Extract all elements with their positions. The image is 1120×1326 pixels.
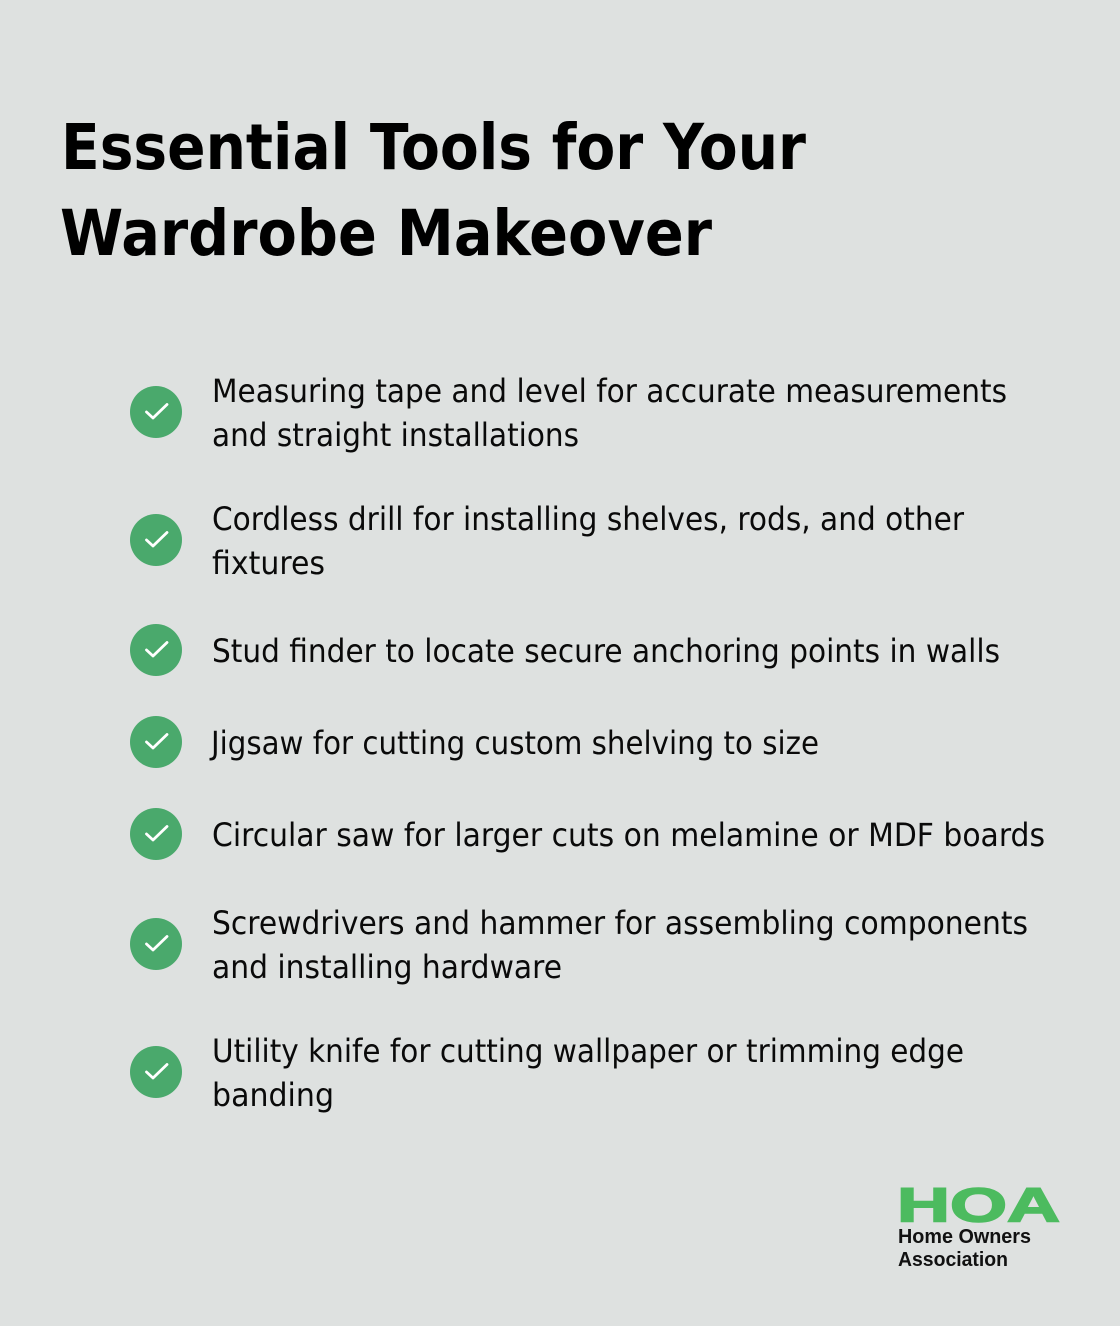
item: stud finder: Stud finder to locate secure anchoring points in walls: [212, 632, 1000, 670]
item: cordless drill: fixtures: [212, 544, 325, 582]
item: utility knife: Utility knife for cutting wallpaper or trimming edge: [212, 1032, 964, 1070]
item: utility knife: banding: [212, 1076, 334, 1114]
item: screwdrivers and hammer: [130, 904, 1028, 986]
item: circular saw: Circular saw for larger cuts on melamine or MDF boards: [212, 816, 1045, 854]
title: Essential Tools for Your: [61, 111, 806, 184]
item: measuring tape: [130, 372, 1007, 454]
title: Wardrobe Makeover: [60, 197, 712, 270]
item: measuring tape: and straight installations: [212, 416, 579, 454]
item: jigsaw: Jigsaw for cutting custom shelving to size: [209, 724, 819, 762]
item: cordless drill: Cordless drill for installing shelves, rods, and other: [212, 500, 965, 538]
logo: HOA: HOA: [897, 1180, 1060, 1232]
item: measuring tape: Measuring tape and level for accurate measurements: [212, 372, 1007, 410]
checklist: [130, 372, 1045, 1114]
item: circular saw: [130, 808, 1045, 860]
item: jigsaw: [130, 716, 819, 768]
item: cordless drill: [130, 500, 965, 582]
item: screwdrivers and hammer: and installing hardware: [212, 948, 562, 986]
item: stud finder: [130, 624, 1000, 676]
logo: HOA: Home Owners: [898, 1226, 1031, 1248]
item: screwdrivers and hammer: Screwdrivers and hammer for assembling components: [212, 904, 1028, 942]
item: utility knife: [130, 1032, 964, 1114]
title: [60, 111, 806, 270]
logo: HOA: Association: [898, 1249, 1008, 1271]
logo: HOA: [897, 1180, 1060, 1271]
